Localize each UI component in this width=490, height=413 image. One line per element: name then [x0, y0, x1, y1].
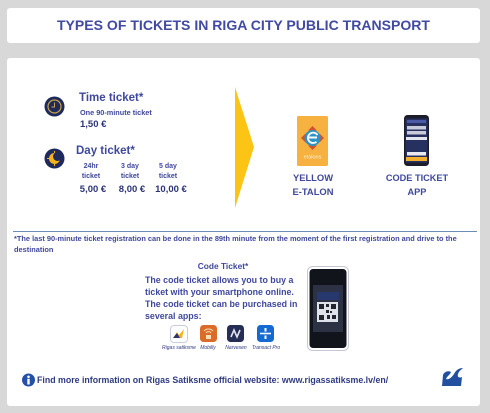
icon: yellow e-talon card [297, 116, 328, 166]
title: TYPES OF TICKETS IN RIGA CITY PUBLIC TRANSPORT [57, 17, 430, 33]
3 day ticket option: 3 day [121, 163, 139, 170]
time ticket heading: Time ticket* [79, 92, 143, 104]
3 day ticket option: ticket [121, 172, 139, 180]
icon: phone with code ticket app [404, 115, 429, 166]
divider [13, 231, 477, 232]
icon: Rigas Satiksme logo [442, 368, 463, 386]
5 day price: 10,00 € [155, 184, 187, 195]
arrow [235, 87, 254, 208]
time ticket description: One 90-minute ticket [80, 108, 152, 117]
icon: yellow e-talon card: etalons [304, 154, 322, 160]
code ticket description: several apps: [145, 311, 202, 321]
footnote: *The last 90-minute ticket registration can be done in the 89th minute from the moment of the first registration and drive to the destination [14, 234, 457, 254]
yellow e-talon label: YELLOW [293, 172, 333, 183]
code ticket app label [386, 173, 448, 196]
icon: information [22, 374, 35, 386]
24hr ticket option [82, 162, 100, 180]
code ticket description: The code ticket can be purchased in [145, 299, 297, 309]
code ticket app label: CODE TICKET [386, 173, 448, 183]
icon: Narvesen app [227, 325, 244, 342]
5 day ticket option: ticket [159, 172, 177, 180]
code ticket app label: APP [408, 186, 426, 196]
day ticket heading: Day ticket* [76, 145, 135, 157]
3 day price: 8,00 € [119, 184, 145, 195]
3 day ticket option [120, 162, 139, 180]
yellow e-talon label [293, 172, 334, 196]
icon: phone with QR code [307, 266, 349, 351]
app name: Transact Pro: Transact Pro [252, 345, 280, 351]
yellow e-talon label: E-TALON [293, 186, 333, 196]
5 day ticket option [158, 162, 177, 180]
code ticket description [145, 275, 297, 321]
app name: Narvesen: Narvesen [225, 345, 247, 351]
website link text: Find more information on Rigas Satiksme official website: www.rigassatiksme.lv/en/ [37, 375, 388, 385]
24hr ticket option: 24hr [84, 163, 98, 170]
code ticket description: ticket with your smartphone online. [145, 287, 294, 297]
icon: Transact Pro app [257, 325, 274, 342]
app name: Rigas satiksme: Rigas satiksme [162, 345, 196, 351]
code ticket description: The code ticket allows you to buy a [145, 275, 293, 285]
24hr price: 5,00 € [80, 184, 106, 195]
time ticket price: 1,50 € [80, 119, 106, 130]
icon: Rigas satiksme app [170, 325, 188, 343]
icon: clock [44, 96, 64, 116]
app name: Mobilly: Mobilly [200, 345, 216, 351]
24hr ticket option: ticket [82, 172, 100, 180]
code ticket heading: Code Ticket* [198, 261, 248, 271]
icon: moon and sun [44, 148, 64, 168]
5 day ticket option: 5 day [159, 163, 177, 170]
icon: Mobilly app [200, 325, 217, 342]
title panel [7, 8, 480, 43]
